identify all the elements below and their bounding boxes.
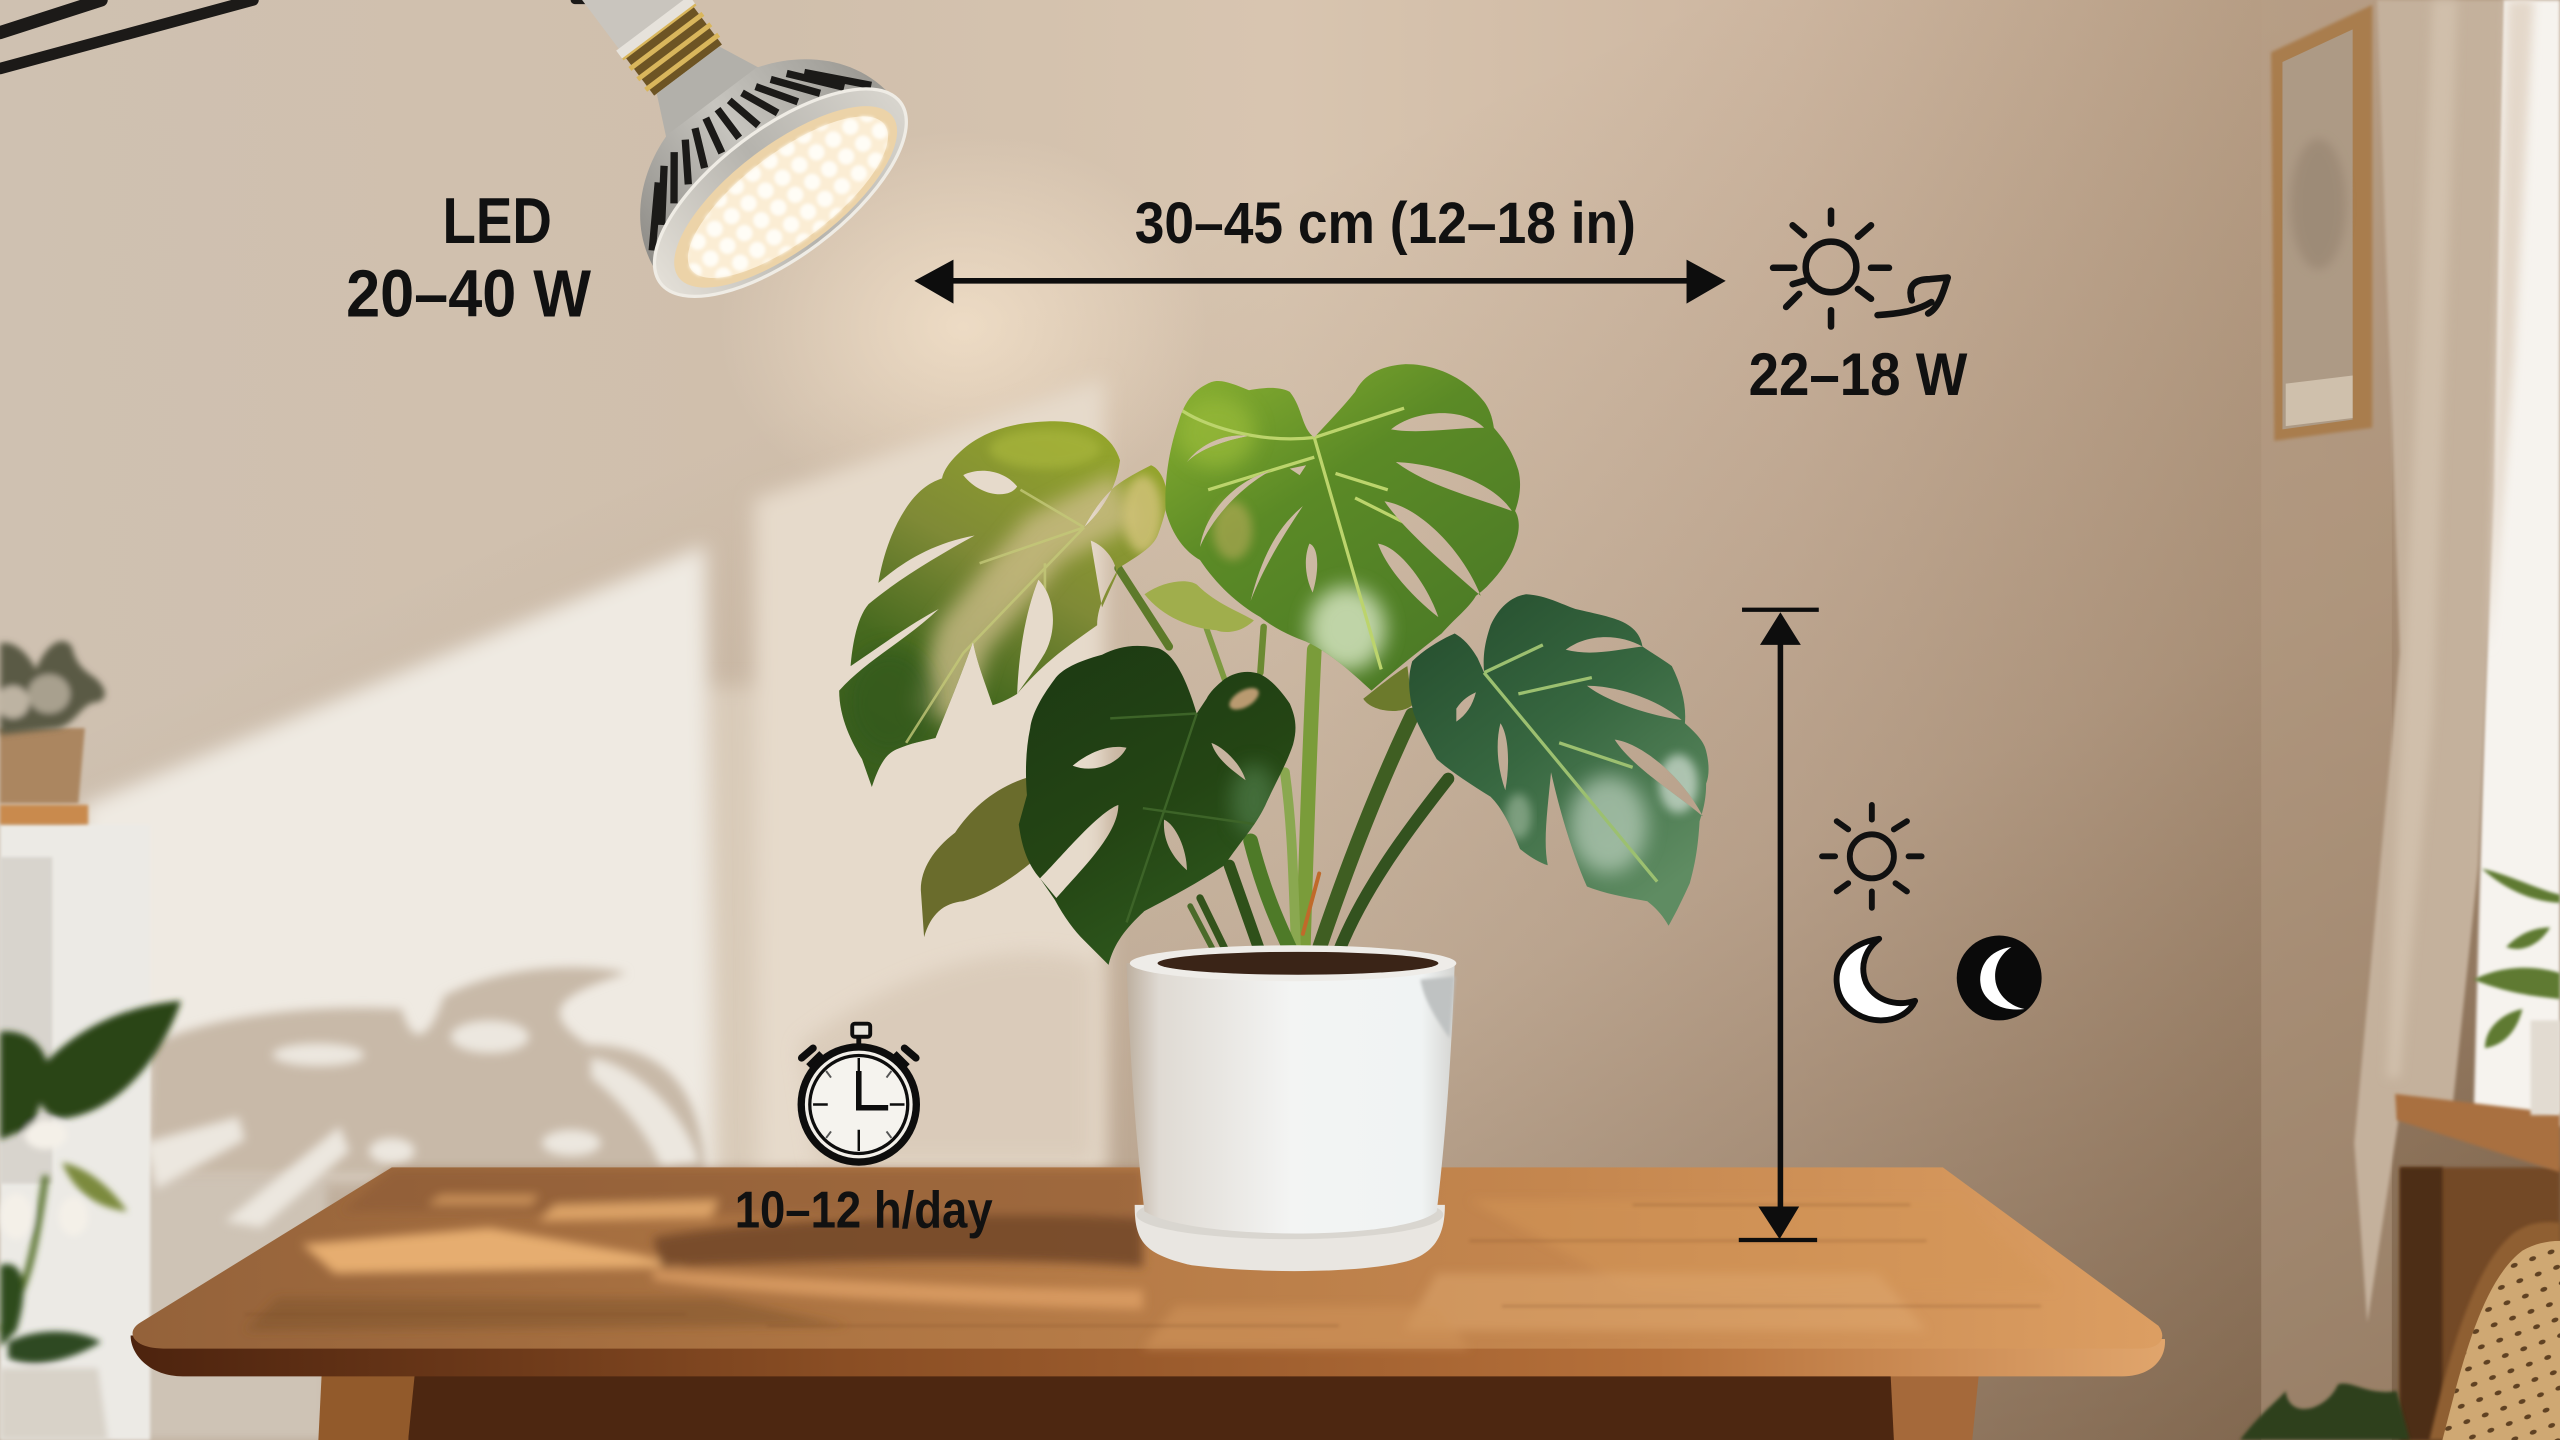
- right background: curtain and window: [2354, 0, 2560, 1322]
- horizontal distance arrow: [914, 260, 1726, 304]
- wood grain: [245, 1205, 2041, 1326]
- small leaf, olive behind dark leaf: [921, 777, 1032, 937]
- light and shadow on the table: [245, 1169, 2057, 1349]
- left background: cabinet and small plant: [0, 641, 150, 1440]
- table legs and apron: [318, 1375, 1979, 1440]
- pot body: [1127, 963, 1455, 1233]
- neck: [641, 35, 761, 139]
- saucer: [1135, 1205, 1445, 1271]
- wooden table: [131, 1167, 2165, 1440]
- LED lamp: [582, 0, 908, 298]
- table edge: [131, 1336, 2165, 1376]
- table top: [133, 1167, 2162, 1349]
- icon: stopwatch: [798, 1024, 920, 1166]
- distance label: 30–45 cm (12–18 in): [1135, 191, 1636, 256]
- daily hours label: 10–12 h/day: [735, 1182, 993, 1240]
- wattage label, right: 22–18 W: [1749, 340, 1967, 408]
- sunlight patches on the wall: [82, 379, 1107, 1440]
- icon: crescent moon solid: [1957, 936, 2042, 1020]
- small leaf, yellow green: [1144, 581, 1254, 632]
- heat sink: [640, 59, 886, 266]
- icon: sun with leaf: [1773, 211, 1948, 327]
- right background: picture frame: [2271, 5, 2372, 441]
- stems: [1118, 568, 1448, 971]
- soil: [1130, 945, 1456, 981]
- white pot with saucer: [1127, 945, 1456, 1271]
- monstera plant: [839, 364, 1709, 971]
- plant shadow on the wall: [144, 953, 1094, 1228]
- right background: side table and window plant: [2395, 869, 2560, 1440]
- floor plant, bottom right: [2240, 1384, 2410, 1440]
- lamp arm: [0, 0, 588, 69]
- vertical height arrow: [1739, 610, 1819, 1240]
- blurred foreground plant, lower left: [0, 1001, 181, 1440]
- LED wattage label: 20–40 W: [346, 257, 592, 332]
- icon: sun, day cycle: [1822, 805, 1922, 908]
- icon: crescent moon outline: [1837, 939, 1915, 1020]
- screw thread: [616, 0, 725, 98]
- leaf: top centre, bright green: [1165, 364, 1520, 691]
- LED wattage label: [346, 184, 592, 332]
- leaf: centre, dark green: [1019, 646, 1295, 965]
- pot reflection: [1420, 976, 1455, 1038]
- leaf: top left, sunlit: [839, 421, 1167, 787]
- leaf: right, blue green: [1409, 594, 1709, 926]
- LED wattage label: LED: [442, 184, 552, 257]
- rattan chair: [2429, 1222, 2560, 1440]
- lamp cap: [575, 0, 691, 55]
- rim and lens: [622, 51, 939, 334]
- small leaf, right: [1363, 666, 1412, 711]
